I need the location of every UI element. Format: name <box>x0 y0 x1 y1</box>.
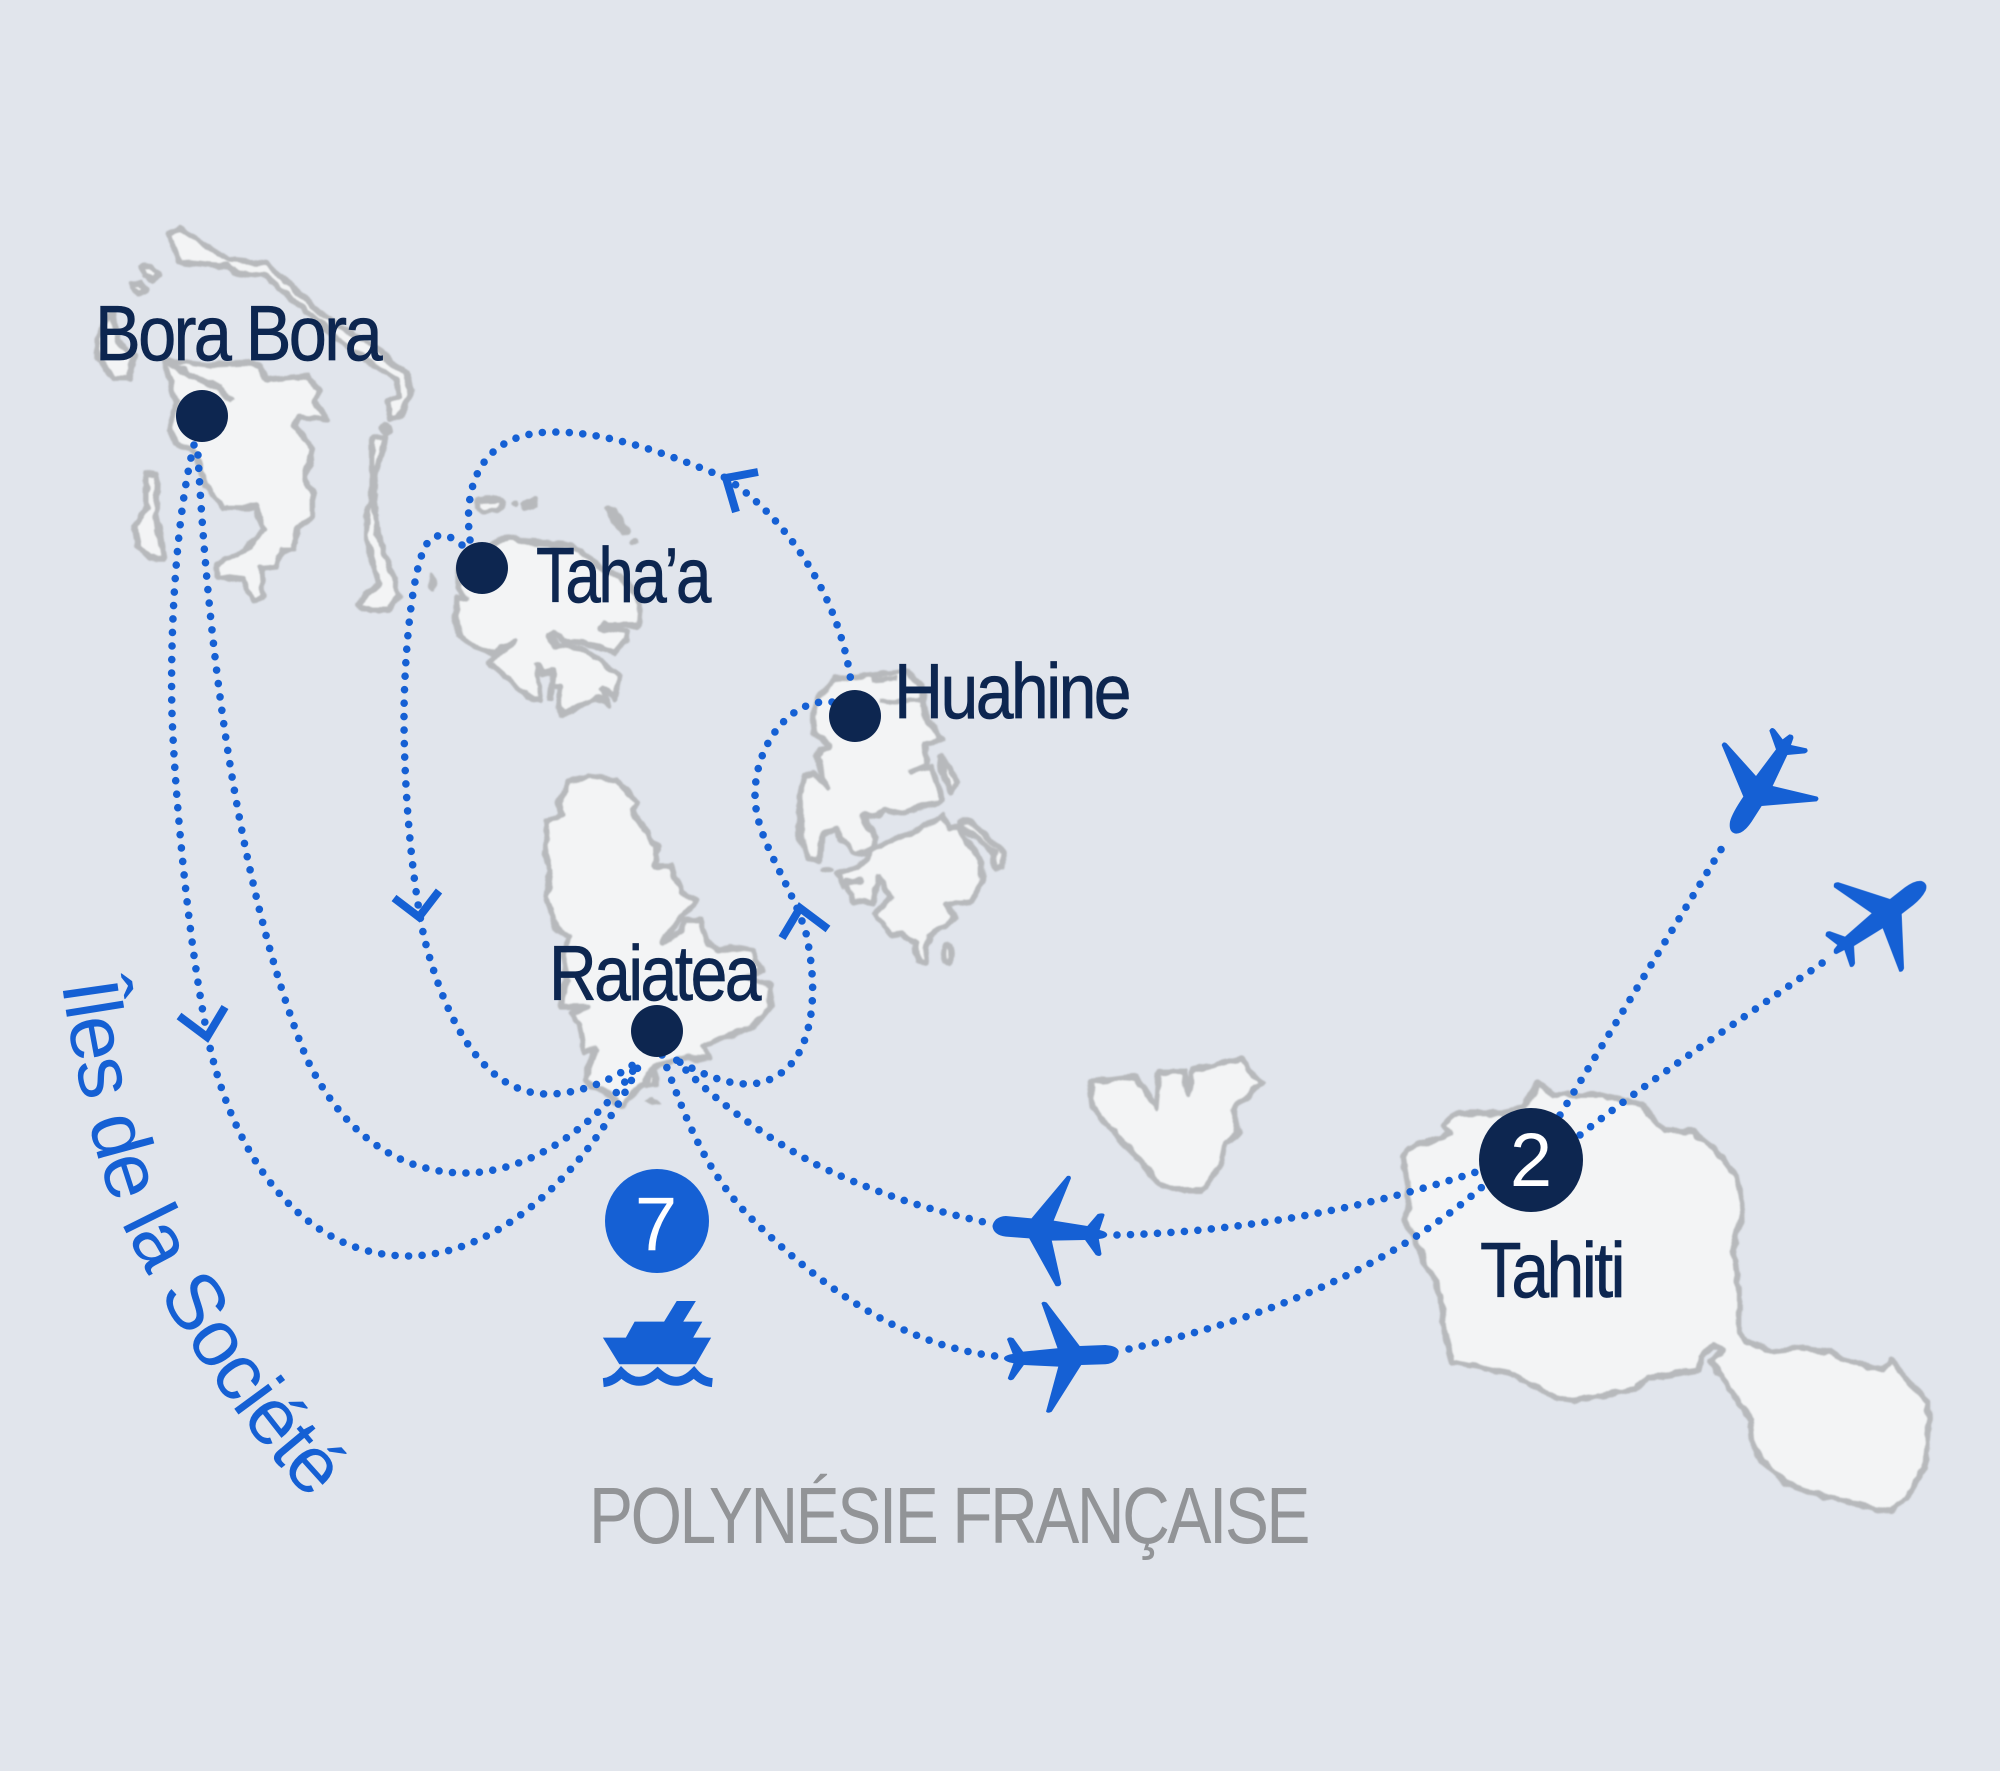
icon: plane arriving at Tahiti from north-east <box>1722 728 1819 834</box>
marker: Huahine <box>829 690 881 742</box>
islands <box>96 228 1928 1512</box>
island: Raiatea <box>545 776 771 1106</box>
icon: plane from Tahiti to Raiatea, lower <box>1004 1302 1119 1413</box>
marker: Taha'a <box>456 542 508 594</box>
arrow: route from Taha'a <box>394 891 439 917</box>
marker: Raiatea <box>631 1005 683 1057</box>
island: Moorea <box>1090 1058 1262 1190</box>
badge: 2 nights in Tahiti: 2 <box>1510 1118 1552 1203</box>
label: Taha'a: Taha’a <box>536 531 712 619</box>
badge: 2 nights in Tahiti <box>1479 1108 1583 1212</box>
label: Bora Bora: Bora Bora <box>95 289 383 377</box>
icon: ship <box>603 1301 712 1383</box>
curved label: Îles de la Société: Îles de la Société <box>62 973 347 1492</box>
label: Tahiti: Tahiti <box>1480 1226 1623 1314</box>
island: Huahine <box>800 671 1004 963</box>
island: Bora Bora <box>96 228 411 610</box>
arrow: route to Huahine <box>782 908 828 938</box>
label: Raiatea: Raiatea <box>549 929 762 1017</box>
island: Taha'a <box>428 499 640 715</box>
icon: plane from Raiatea to Tahiti, upper <box>992 1176 1107 1286</box>
label: Huahine: Huahine <box>894 647 1129 735</box>
island: Tahiti <box>1403 1082 1928 1512</box>
marker: Bora Bora <box>176 390 228 442</box>
badge: 7 nights cruise: 7 <box>635 1182 677 1267</box>
arrow: route to Raiatea from Bora Bora <box>179 1007 225 1037</box>
arrow: route to Taha'a <box>726 472 758 512</box>
icon: plane departing Tahiti to north-east <box>1826 881 1926 972</box>
label: Polynésie française: POLYNÉSIE FRANÇAISE <box>589 1471 1308 1560</box>
dotted sea and air routes <box>172 432 1828 1356</box>
badge: 7 nights cruise <box>605 1169 709 1273</box>
